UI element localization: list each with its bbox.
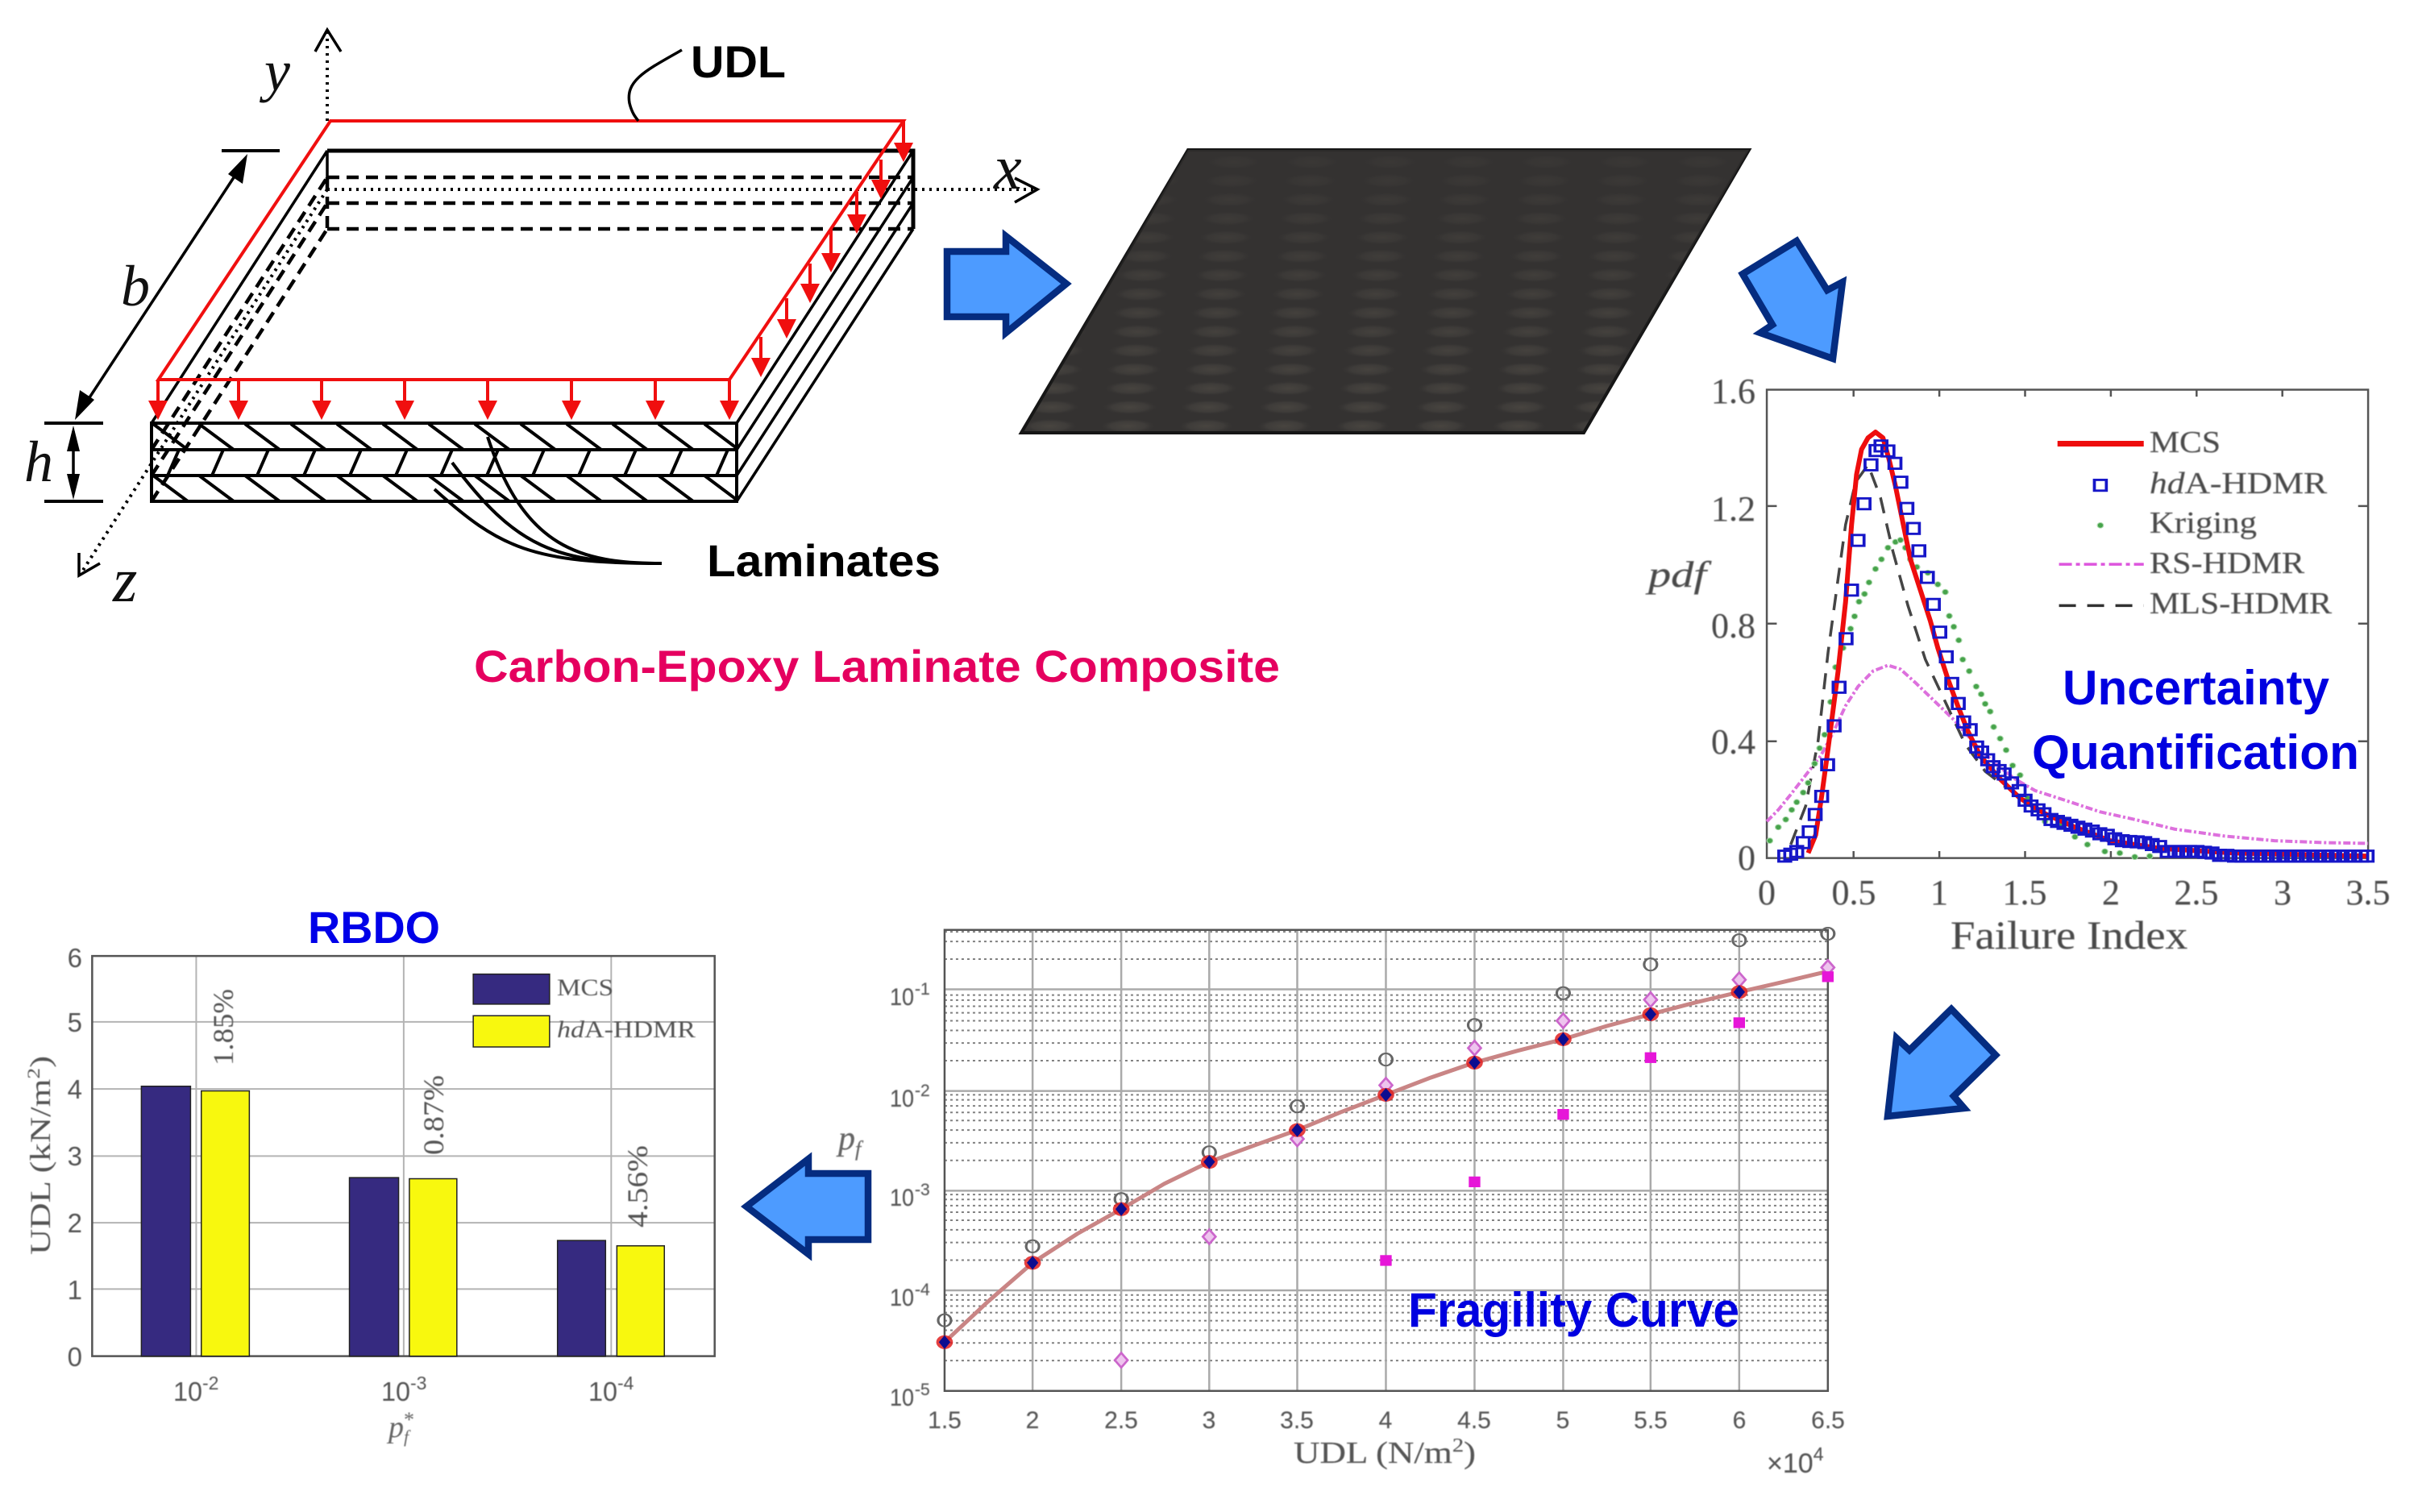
- heading: Carbon-Epoxy Laminate Composite: Carbon-Epoxy Laminate Composite: [474, 641, 1280, 692]
- black circles: [945, 934, 1828, 1320]
- tick and axis labels: 6: [68, 943, 82, 973]
- UDL label: UDL: [691, 36, 786, 87]
- axis and dimension labels: b: [121, 254, 150, 318]
- arrow: plate to composite: [947, 236, 1066, 333]
- heading: Uncertainty Quantification: Quantification: [2032, 725, 2359, 779]
- bars: [141, 1086, 664, 1356]
- tick labels: 3: [1203, 1407, 1215, 1434]
- grid: [92, 956, 715, 1356]
- arrow: composite to uncertainty chart: [1743, 241, 1843, 359]
- chart: fragility curve: [836, 930, 1845, 1479]
- axis and dimension labels: y: [259, 39, 290, 103]
- heading: RBDO: RBDO: [308, 902, 440, 953]
- blue diamonds: [945, 992, 1739, 1342]
- axis and dimension labels: h: [24, 430, 53, 494]
- tick labels: 1.5: [2002, 873, 2047, 912]
- tick labels: f: [855, 1137, 864, 1161]
- legend swatches: [473, 974, 550, 1004]
- tick labels: 4: [1379, 1407, 1392, 1434]
- tick labels: 10: [890, 1086, 914, 1112]
- tick and axis labels: 0.87%: [418, 1075, 450, 1155]
- tick labels: -2: [915, 1082, 930, 1100]
- tick and axis labels: 2: [23, 1068, 44, 1079]
- tick and axis labels: 10: [381, 1377, 410, 1406]
- tick and axis labels: -2: [202, 1373, 218, 1394]
- tick labels: 0: [1758, 873, 1776, 912]
- axis titles: ): [1464, 1436, 1476, 1470]
- heading: Uncertainty Quantification: Uncertainty: [2063, 661, 2330, 715]
- MLS-HDMR curve: [1791, 465, 2005, 845]
- UDL label: [629, 36, 786, 121]
- pink diamonds: [1121, 967, 1828, 1360]
- legend labels: MCS: [2150, 426, 2221, 459]
- tick labels: ×10: [1767, 1448, 1814, 1479]
- fitted curve: [945, 971, 1828, 1342]
- tick labels: 0.4: [1711, 722, 1755, 762]
- tick and axis labels: 10: [588, 1377, 617, 1406]
- tick labels: pdf: [1645, 554, 1713, 595]
- dimension: b and h: [44, 151, 280, 501]
- red UDL load surface: [158, 121, 904, 403]
- chart: uncertainty quantification pdf: [1645, 372, 2391, 957]
- tick labels: 2.5: [2175, 873, 2218, 912]
- panel: laminate plate diagram: [24, 30, 1037, 615]
- tick and axis labels: hdA-HDMR: [557, 1016, 696, 1043]
- Kriging points: [1770, 540, 2150, 857]
- tick labels: 10: [890, 1385, 914, 1411]
- hidden dashed edges of plate: [152, 177, 913, 501]
- tick labels: 3.5: [1280, 1407, 1314, 1434]
- axis titles: 2: [1452, 1435, 1464, 1456]
- tick and axis labels: MCS: [557, 974, 613, 1001]
- tick and axis labels: f: [404, 1427, 411, 1447]
- legend labels: hdA-HDMR: [2150, 467, 2328, 501]
- tick labels: 6: [1733, 1407, 1746, 1434]
- tick and axis labels: 1: [68, 1275, 82, 1305]
- tick labels: 10: [890, 1285, 914, 1311]
- plot frame: [945, 930, 1828, 1391]
- red load arrowheads: [148, 143, 913, 420]
- axis and dimension labels: [24, 39, 1022, 615]
- legend labels: Kriging: [2150, 506, 2257, 540]
- tick labels: -5: [915, 1381, 930, 1399]
- arrow: fragility curve to RBDO: [746, 1159, 868, 1254]
- hdA-HDMR points: [1784, 446, 2367, 856]
- tick and axis labels: 10: [173, 1377, 202, 1406]
- tick and axis labels: 1.85%: [207, 989, 239, 1065]
- axis titles: UDL (N/m: [1294, 1436, 1427, 1470]
- tick and axis labels: *: [404, 1408, 414, 1431]
- minor grid: [945, 932, 1828, 1360]
- tick and axis labels: 0: [68, 1342, 82, 1372]
- tick labels: [1645, 372, 2391, 957]
- tick labels: 2: [2102, 873, 2120, 912]
- arrow: uncertainty chart to fragility curve: [1888, 1009, 1996, 1116]
- legend labels: RS-HDMR: [2150, 546, 2305, 580]
- tick and axis labels: -3: [410, 1373, 426, 1394]
- tick labels: 0.8: [1711, 606, 1755, 646]
- tick labels: 5.5: [1634, 1407, 1668, 1434]
- tick and axis labels: UDL (kN/m: [24, 1113, 56, 1255]
- axis titles: Failure Index: [1951, 912, 2187, 957]
- tick and axis labels: -4: [617, 1373, 634, 1394]
- tick labels: 4.5: [1457, 1407, 1491, 1434]
- tick labels: -1: [915, 980, 930, 999]
- heading: Uncertainty Quantification: [2032, 661, 2359, 779]
- Laminates label: Laminates: [707, 535, 941, 586]
- tick labels: 1: [1930, 873, 1948, 912]
- legend samples: [2058, 441, 2144, 447]
- image: carbon fibre composite swatch: [1021, 150, 1749, 433]
- legend labels: MLS-HDMR: [2150, 587, 2333, 621]
- tick and axis labels: [23, 943, 696, 1447]
- tick labels: 2.5: [1104, 1407, 1138, 1434]
- tick labels: [836, 980, 1845, 1479]
- tick labels: 10: [890, 984, 914, 1011]
- tick and axis labels: p: [386, 1410, 404, 1444]
- heading: Fragility Curve: Fragility Curve: [1408, 1283, 1739, 1337]
- tick labels: 4: [1814, 1443, 1824, 1464]
- tick labels: 1.2: [1711, 489, 1755, 529]
- tick and axis labels: 3: [68, 1141, 82, 1171]
- tick labels: -4: [915, 1281, 930, 1299]
- tick labels: 10: [890, 1185, 914, 1211]
- tick labels: -3: [915, 1181, 930, 1199]
- black plate edges: [152, 151, 913, 501]
- tick and axis labels: 5: [68, 1007, 82, 1037]
- axis and dimension labels: z: [112, 545, 137, 615]
- legend labels: [2150, 426, 2333, 621]
- tick labels: 1.6: [1711, 372, 1755, 411]
- magenta squares: [1386, 977, 1828, 1261]
- MCS curve: [1808, 432, 2368, 856]
- tick labels: 1.5: [928, 1407, 962, 1434]
- tick labels: 0.5: [1831, 873, 1876, 912]
- axis and dimension labels: x: [993, 132, 1022, 202]
- plot frame: [1767, 389, 2368, 858]
- axes: [79, 30, 1037, 575]
- tick labels: 5: [1556, 1407, 1569, 1434]
- major grid: [945, 930, 1828, 1391]
- tick and axis labels: 4.56%: [621, 1145, 654, 1227]
- tick labels: 3.5: [2345, 873, 2391, 912]
- chart: RBDO bar chart: [23, 902, 715, 1447]
- plot frame: [92, 956, 715, 1356]
- tick and axis labels: 2: [68, 1208, 82, 1238]
- tick labels: p: [838, 1120, 855, 1157]
- tick labels: 2: [1026, 1407, 1039, 1434]
- tick labels: 0: [1738, 838, 1755, 878]
- RS-HDMR curve: [1767, 665, 2368, 843]
- tick labels: 3: [2274, 873, 2291, 912]
- tick and axis labels: 4: [68, 1074, 82, 1104]
- tick labels: 6.5: [1811, 1407, 1845, 1434]
- tick and axis labels: ): [24, 1056, 56, 1068]
- Laminates label: [434, 437, 941, 586]
